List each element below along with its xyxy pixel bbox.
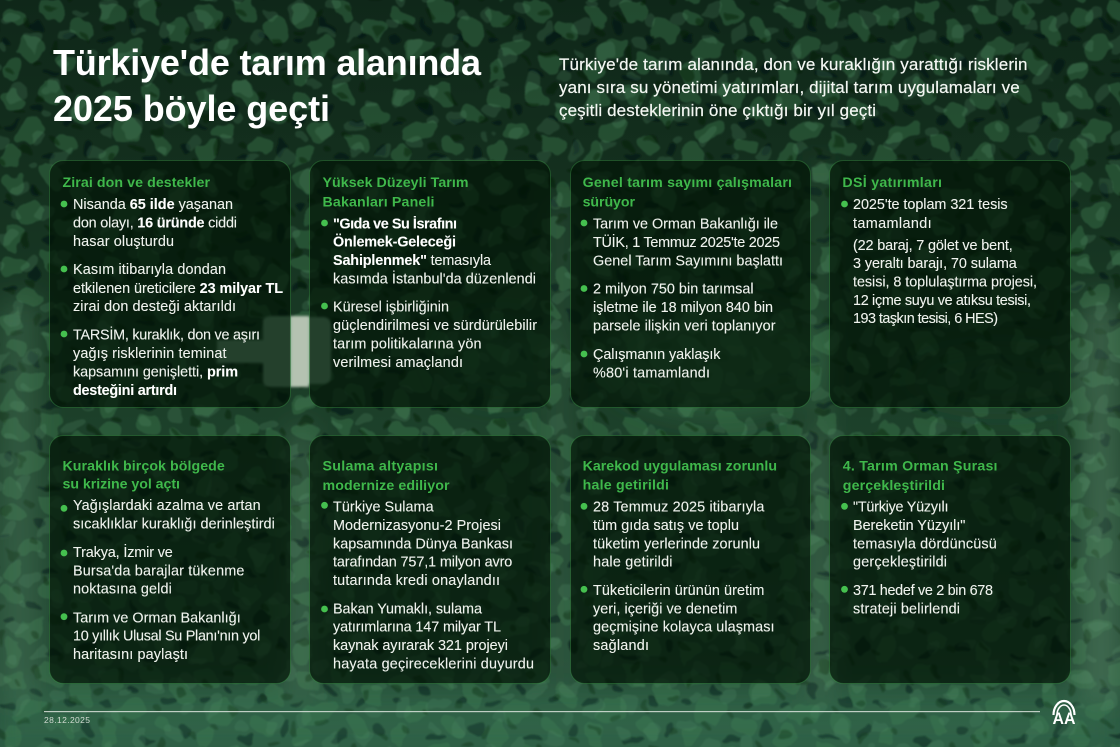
- title: 2025 böyle geçti: [53, 88, 330, 129]
- bullet: QR requirement: hale getirildi: [593, 555, 672, 571]
- text: facilities breakdown: 193 taşkın tesisi, 6 HES): [853, 311, 998, 327]
- panel: Kuraklık: su krizine yol açtı: [62, 477, 180, 493]
- bullet: facilities total: [841, 197, 1008, 232]
- bullet: consumer access: yeri, içeriği ve denetim: [593, 601, 737, 617]
- panel: Karekod uygulaması: hale getirildi: [583, 477, 669, 493]
- bullet: dams: Trakya, İzmir ve: [73, 543, 173, 561]
- bullet: census start: Genel Tarım Sayımını başlattı: [593, 253, 783, 269]
- intro text: çeşitli desteklerinin öne çıktığı bir yıl geçti: [559, 101, 876, 120]
- bullet: consumer access: Tüketicilerin ürünün üretim: [593, 583, 764, 599]
- bullet: census data: [581, 282, 776, 334]
- bullet: minister announcement: hayata geçireceklerini duyurdu: [333, 656, 534, 672]
- bullet: World Bank loan: Modernizasyonu-2 Projesi: [333, 518, 501, 534]
- panel: Genel tarım sayımı: sürüyor: [583, 194, 635, 210]
- heading: Zirai don ve destekler: Zirai don ve destekler: [62, 175, 210, 191]
- bullet: census progress: %80'i tamamlandı: [593, 365, 710, 381]
- bullet: panel theme: Önlemek-Geleceği: [333, 234, 456, 251]
- bullet: dams: [61, 543, 244, 598]
- heading: Yüksek Düzeyli Tarım Bakanları Paneli: Yüksek Düzeyli Tarım: [322, 175, 468, 191]
- panel: Sulama altyapısı: [310, 436, 550, 684]
- bullet: census start: Tarım ve Orman Bakanlığı ile: [593, 216, 778, 232]
- bullet: dams: Bursa'da barajlar tükenme: [73, 563, 244, 579]
- bullet: frost support: zirai don desteği aktarıldı: [73, 299, 236, 315]
- title: [53, 42, 482, 129]
- text: facilities breakdown: 3 yeraltı barajı, 70 sulama: [853, 256, 1017, 272]
- date: 28.12.2025: [44, 715, 90, 725]
- bullet: water plan: Tarım ve Orman Bakanlığı: [73, 610, 241, 626]
- bullet: census progress: [581, 347, 721, 381]
- bullet: drought causes: [61, 498, 275, 533]
- heading: Sulama altyapısı modernize ediliyor: Sulama altyapısı: [322, 459, 438, 475]
- image artifact: blurred patch between first two panels: [217, 316, 331, 387]
- icon: Anadolu Agency logo: [1052, 701, 1076, 728]
- panel: Sulama altyapısı: modernize ediliyor: [322, 478, 450, 494]
- bullet: frost damage: Nisanda 65 ilde yaşanan: [73, 197, 233, 213]
- bullet: minister announcement: Bakan Yumaklı, sulama: [333, 601, 482, 617]
- bullet: panel theme: kasımda İstanbul'da düzenlendi: [333, 270, 536, 288]
- bullet: QR requirement: [581, 500, 764, 571]
- bullet: TARSİM: kapsamını genişletti, prim: [73, 364, 238, 380]
- heading: DSİ yatırımları: DSİ yatırımları: [842, 174, 942, 191]
- bullet: census progress: Çalışmanın yaklaşık: [593, 347, 721, 363]
- panel: Yüksek Düzeyli Tarım Bakanları Paneli: [310, 160, 550, 408]
- heading: 4. Tarım Orman Şurası gerçekleştirildi: 4. Tarım Orman Şurası: [843, 459, 998, 475]
- bullet: council targets: strateji belirlendi: [853, 601, 960, 617]
- intro text: yanı sıra su yönetimi yatırımları, dijital tarım uygulamaları ve: [559, 78, 1020, 97]
- bullet: facilities total: tamamlandı: [853, 216, 932, 232]
- bullet: frost support: [61, 262, 283, 315]
- bullet: water plan: [61, 610, 260, 663]
- text: facilities breakdown: 12 içme suyu ve atıksu tesisi,: [853, 293, 1031, 309]
- heading: Kuraklık birçok bölgede su krizine yol açtı: Kuraklık birçok bölgede: [62, 459, 225, 475]
- bullet: council theme: temasıyla dördüncüsü: [853, 536, 997, 552]
- bullet: World Bank loan: tutarında kredi onaylandıı: [333, 573, 500, 589]
- intro text: [559, 55, 1028, 120]
- bullet: frost damage: hasar oluşturdu: [73, 234, 174, 250]
- footer line: [44, 711, 1040, 712]
- bullet: minister announcement: [321, 601, 534, 672]
- bullet: World Bank loan: kapsamında Dünya Bankası: [333, 536, 513, 552]
- bullet: World Bank loan: [321, 500, 513, 589]
- bullet: census data: işletme ile 18 milyon 840 bin: [593, 300, 773, 316]
- bullet: QR requirement: tüm gıda satış ve toplu: [593, 518, 739, 534]
- bullet: council theme: gerçekleştirildi: [853, 555, 947, 571]
- bullet: frost support: Kasım itibarıyla dondan: [73, 262, 226, 278]
- bullet: census start: TÜİK, 1 Temmuz 2025'te 2025: [593, 233, 780, 251]
- bullet: drought causes: Yağışlardaki azalma ve artan: [73, 498, 261, 514]
- bullet: panel theme: [321, 215, 536, 288]
- bullet: census data: parsele ilişkin veri toplanıyor: [593, 318, 776, 334]
- text: facilities breakdown: (22 baraj, 7 gölet ve bent,: [853, 238, 1013, 254]
- bullet: consumer access: geçmişine kolayca ulaşması: [593, 620, 774, 636]
- heading: Genel tarım sayımı çalışmaları sürüyor: Genel tarım sayımı çalışmaları: [583, 175, 792, 191]
- bullet: panel theme: "Gıda ve Su İsrafını: [333, 215, 457, 232]
- bullet: frost damage: don olayı, 16 üründe ciddi: [73, 216, 237, 232]
- bullet: panel goal: tarım politikalarına yön: [333, 337, 482, 353]
- panel: Karekod uygulaması: [570, 436, 810, 684]
- bullet: council targets: [841, 583, 993, 617]
- bullet: TARSİM: desteğini artırdı: [73, 383, 177, 399]
- panel: Kuraklık: [50, 436, 290, 684]
- heading: Karekod uygulaması zorunlu hale getirildi: Karekod uygulaması zorunlu: [583, 459, 777, 475]
- panel: 4. Tarım Orman Şurası: [830, 436, 1070, 684]
- bullet: consumer access: [581, 583, 774, 654]
- bullet: water plan: 10 yıllık Ulusal Su Planı'nın yol: [73, 629, 260, 645]
- bullet: TARSİM: yağış risklerinin teminat: [73, 346, 226, 362]
- bullet: World Bank loan: tarafından 757,1 milyon avro: [333, 555, 512, 571]
- bullet: council theme: "Türkiye Yüzyılı: [853, 500, 948, 516]
- bullet: drought causes: sıcaklıklar kuraklığı derinleştirdi: [73, 517, 275, 533]
- bullet: minister announcement: kaynak ayırarak 321 projeyi: [333, 638, 508, 654]
- bullet: panel goal: [321, 300, 537, 371]
- panel: Zirai don ve destekler: [50, 160, 290, 408]
- bullet: TARSİM: [61, 326, 260, 399]
- icon: Anadolu Agency logo: AA: [1052, 709, 1076, 728]
- bullet: census data: 2 milyon 750 bin tarımsal: [593, 282, 754, 298]
- bullet: World Bank loan: Türkiye Sulama: [333, 500, 434, 516]
- bullet: panel goal: verilmesi amaçlandı: [333, 355, 463, 371]
- bullet: facilities total: 2025'te toplam 321 tesis: [853, 197, 1008, 213]
- bullet: water plan: haritasını paylaştı: [73, 647, 188, 663]
- title: Türkiye'de tarım alanında: [53, 42, 482, 83]
- intro text: Türkiye'de tarım alanında, don ve kuraklığın yarattığı risklerin: [559, 55, 1028, 74]
- bullet: panel goal: güçlendirilmesi ve sürdürülebilir: [333, 318, 537, 334]
- bullet: council targets: 371 hedef ve 2 bin 678: [853, 583, 993, 599]
- panel: Yüksek Düzeyli Tarım Bakanları Paneli: Bakanları Paneli: [322, 194, 434, 210]
- panel: Genel tarım sayımı: [570, 160, 810, 408]
- bullet: dams: noktasına geldi: [73, 582, 172, 598]
- bullet: minister announcement: yatırımlarına 147 milyar TL: [333, 620, 501, 636]
- panel: 4. Tarım Orman Şurası: gerçekleştirildi: [843, 478, 945, 494]
- bullet: consumer access: sağlandı: [593, 638, 649, 654]
- bullet: QR requirement: 28 Temmuz 2025 itibarıyla: [593, 500, 764, 516]
- bullet: TARSİM: TARSİM, kuraklık, don ve aşırı: [73, 326, 260, 344]
- bullet: panel theme: Sahiplenmek" temasıyla: [333, 253, 491, 269]
- text: facilities breakdown: tesisi, 8 toplulaştırma projesi,: [853, 275, 1037, 291]
- bullet: frost support: etkilenen üreticilere 23 milyar TL: [73, 281, 283, 297]
- panel: DSİ yatırımları: [830, 160, 1070, 408]
- bullet: QR requirement: tüketim yerlerinde zorunlu: [593, 536, 760, 552]
- text: facilities breakdown: [853, 238, 1037, 327]
- bullet: council theme: [841, 500, 997, 571]
- bullet: census start: [581, 216, 783, 269]
- bullet: frost damage: [61, 197, 237, 250]
- bullet: council theme: Bereketin Yüzyılı": [853, 518, 965, 534]
- bullet: panel goal: Küresel işbirliğinin: [333, 300, 449, 316]
